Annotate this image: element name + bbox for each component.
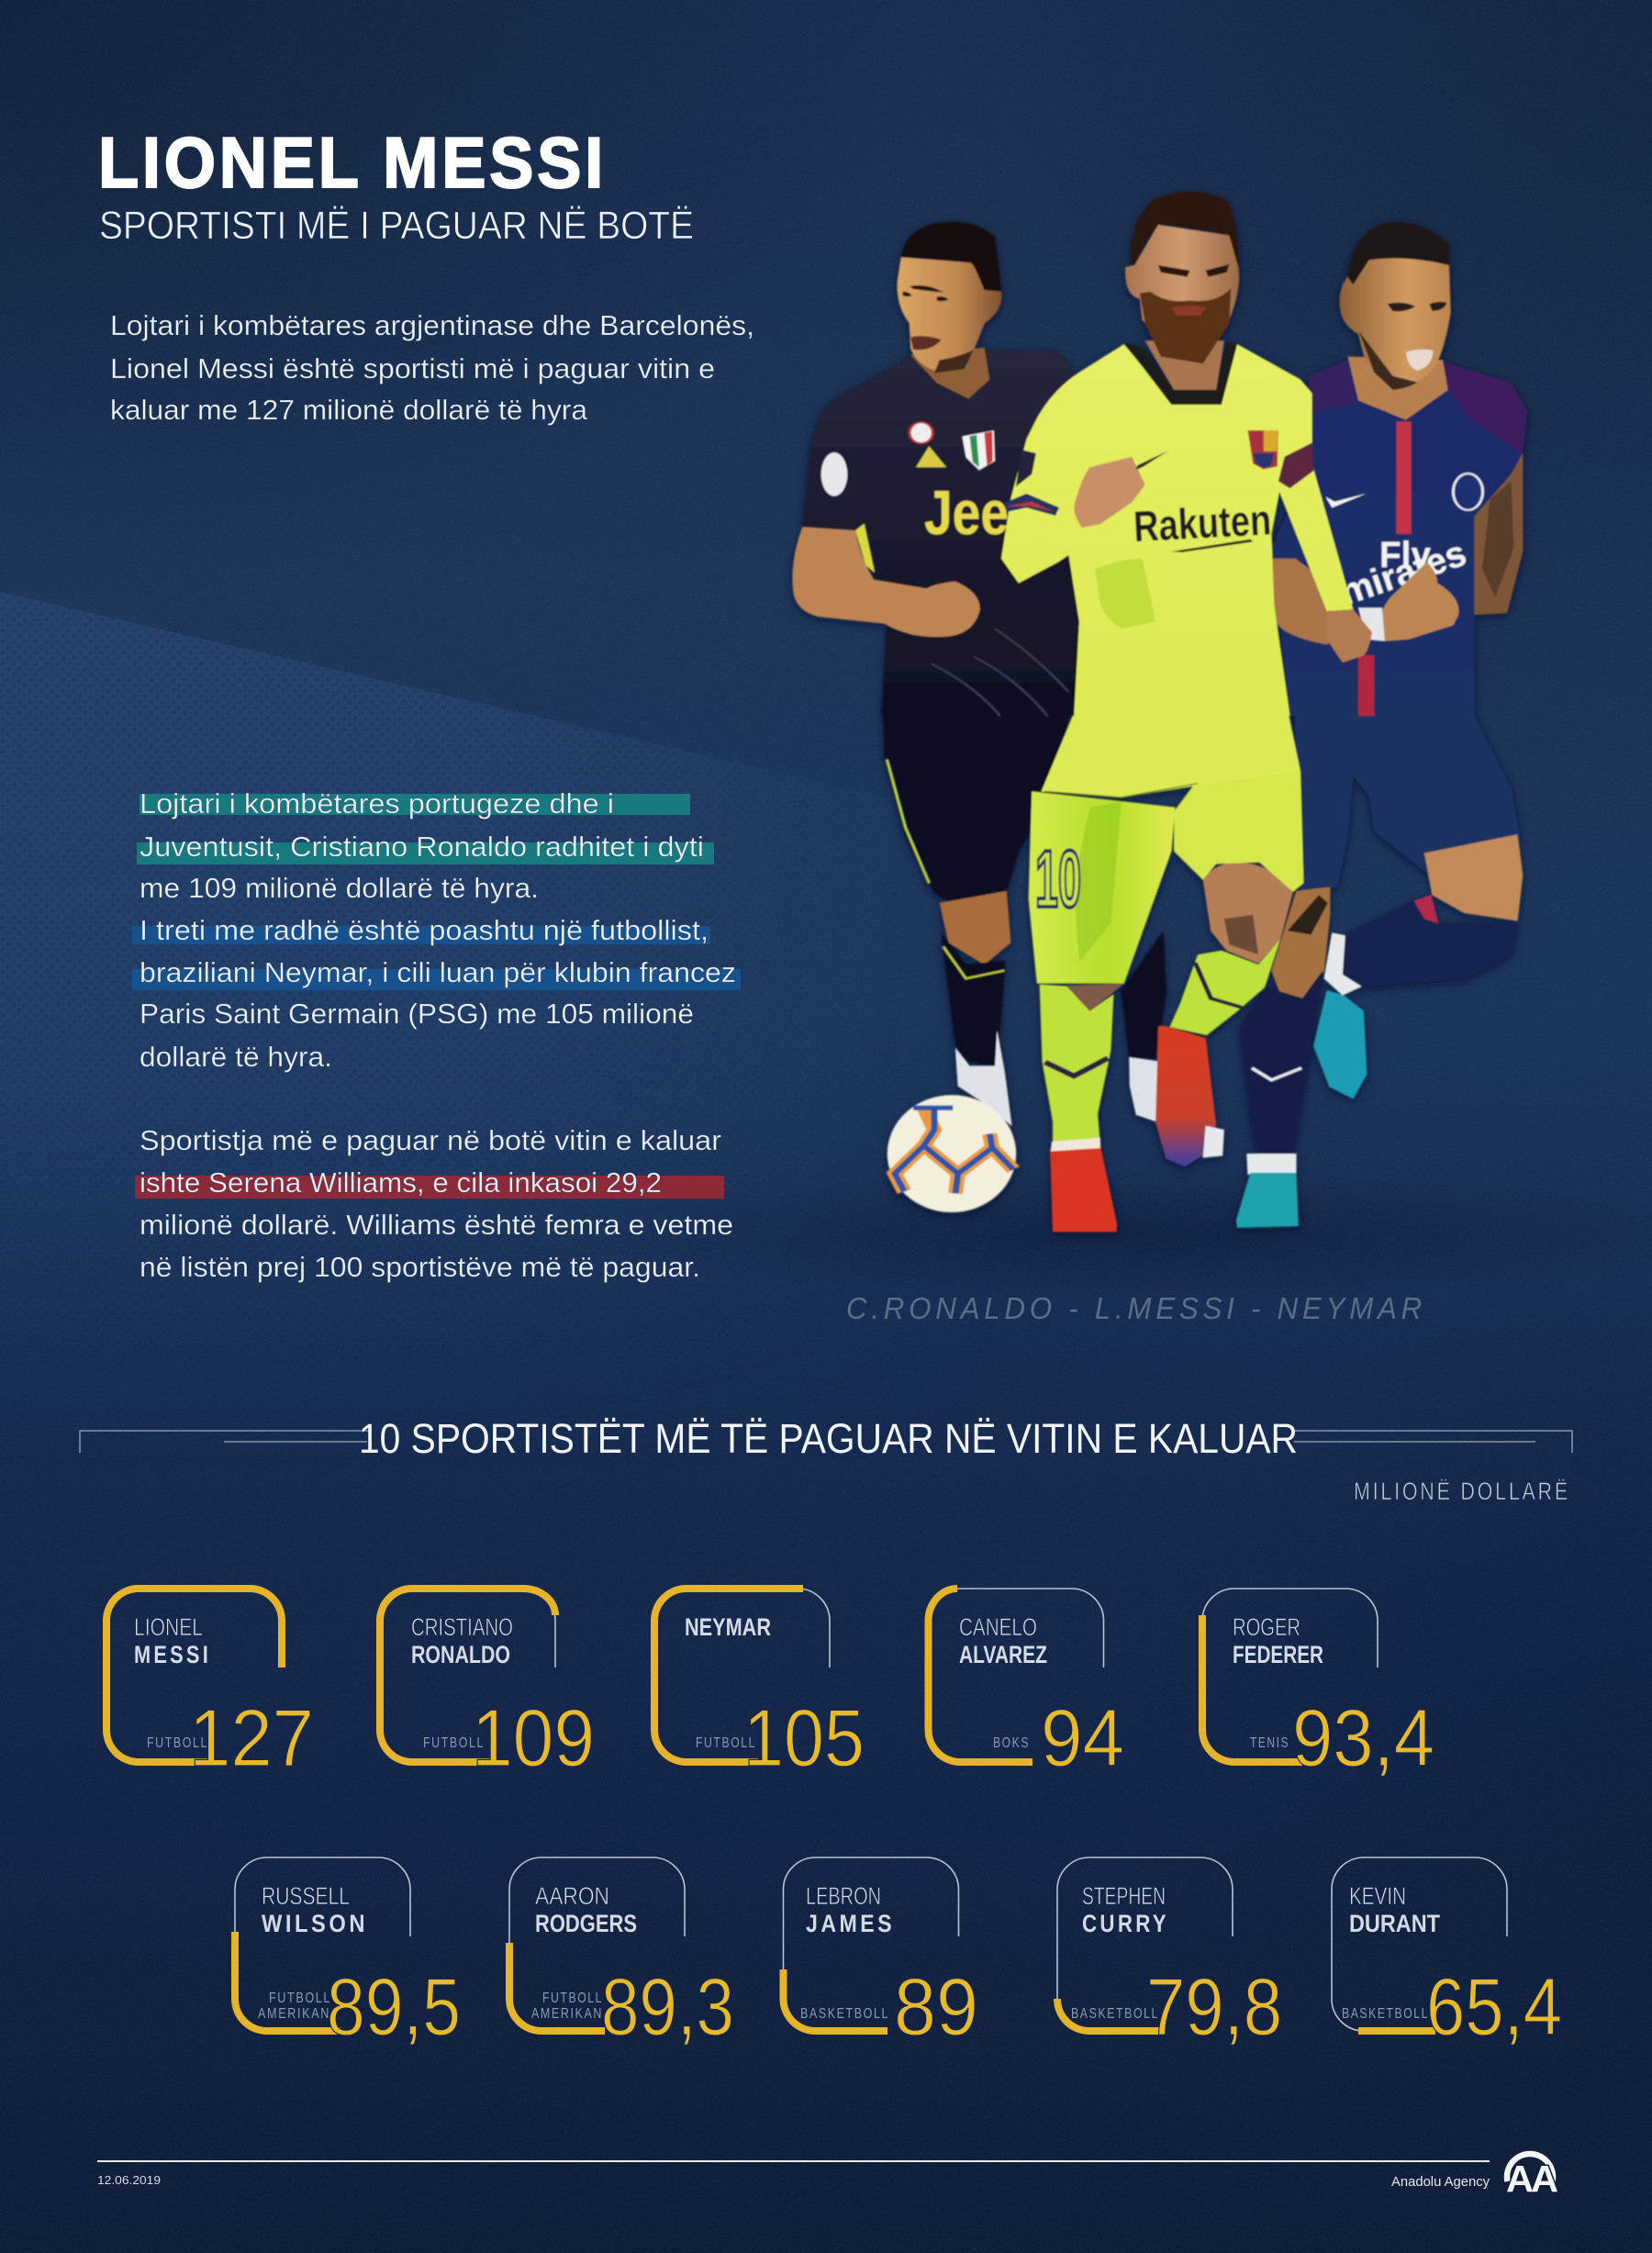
Ronaldo arm [793, 527, 980, 637]
Neymar shirt sponsor: mirates [1335, 533, 1471, 614]
card: Curry [1057, 1857, 1282, 2052]
card: Rodgers: AMERIKAN [531, 2006, 603, 2022]
card: Messi: MESSI [134, 1641, 211, 1668]
card: Alvarez: CANELO [959, 1613, 1037, 1641]
paragraph: Ronaldo and Neymar: I treti me radhë është poashtu një futbollist, [140, 914, 709, 946]
intro text block: kaluar me 127 milionë dollarë të hyra [110, 394, 588, 426]
card: James: LEBRON [806, 1882, 881, 1910]
Ronaldo shirt sponsor: Jee [924, 478, 1009, 548]
card: Wilson: 89,5 [327, 1961, 461, 2052]
card: Wilson: AMERIKAN [258, 2006, 330, 2022]
card: Durant: BASKETBOLL [1342, 2006, 1429, 2022]
card: Wilson [235, 1857, 461, 2052]
subtitle: SPORTISTI MË I PAGUAR NË BOTË [99, 204, 694, 248]
source: Anadolu Agency [1391, 2175, 1490, 2190]
card: Rodgers: AARON [535, 1882, 609, 1910]
player illustration: Ronaldo, Messi, Neymar [793, 192, 1527, 1232]
card: Messi: LIONEL [134, 1613, 203, 1641]
card: Ronaldo: RONALDO [411, 1641, 510, 1668]
highlight: teal Ronaldo [137, 794, 714, 864]
card: Neymar: FUTBOLL [696, 1735, 756, 1751]
paragraph: Serena Williams: milionë dollarë. Williams është femra e vetme [140, 1209, 733, 1241]
football [887, 1095, 1016, 1212]
card: Durant: KEVIN [1349, 1882, 1406, 1910]
card: Durant [1332, 1857, 1562, 2052]
paragraph: Serena Williams [140, 1124, 733, 1283]
card: Wilson: RUSSELL [262, 1882, 350, 1910]
Messi upper body [1001, 192, 1372, 716]
card: James: JAMES [806, 1910, 895, 1937]
heading rules left [80, 1431, 371, 1453]
card: Rodgers: 89,3 [601, 1961, 734, 2052]
card: Ronaldo: CRISTIANO [411, 1613, 513, 1641]
footer rule [97, 2160, 1490, 2162]
intro text block: Lionel Messi është sportisti më i paguar vitin e [110, 352, 715, 385]
card: Durant: 65,4 [1426, 1961, 1562, 2052]
Messi lower body [1029, 716, 1303, 1232]
card: Curry: 79,8 [1146, 1961, 1282, 2052]
card: Messi: FUTBOLL [147, 1735, 208, 1751]
Neymar hand [1358, 562, 1458, 641]
card: Alvarez: 94 [1041, 1692, 1124, 1783]
card: Rodgers [509, 1857, 734, 2052]
card: Federer: TENIS [1250, 1735, 1289, 1751]
Messi shirt sponsor: Rakuten [1133, 495, 1272, 551]
card: James: 89 [894, 1961, 978, 2052]
card: Rodgers: RODGERS [535, 1910, 637, 1937]
card: Curry: BASKETBOLL [1071, 2006, 1159, 2022]
card: Messi: 127 [189, 1692, 314, 1783]
Neymar forearm [1270, 559, 1358, 644]
paragraph: Ronaldo and Neymar [140, 787, 736, 1073]
card: Wilson: FUTBOLL [269, 1991, 331, 2006]
card: Alvarez: ALVAREZ [959, 1641, 1047, 1668]
card: Curry: CURRY [1082, 1910, 1169, 1937]
Ronaldo upper body [793, 222, 1100, 716]
card: Federer [1202, 1589, 1434, 1783]
card: Neymar [654, 1589, 865, 1783]
highlight: blue Neymar [132, 926, 741, 990]
paragraph: Serena Williams: në listën prej 100 sportistëve më të paguar. [140, 1251, 700, 1283]
heading rules right [1294, 1431, 1572, 1453]
highlighted text block [132, 787, 741, 1283]
intro text block [110, 309, 754, 426]
unit label: MILIONË DOLLARË [1354, 1478, 1570, 1505]
card: Rodgers: FUTBOLL [542, 1991, 603, 2006]
paragraph: Ronaldo and Neymar: dollarë të hyra. [140, 1041, 332, 1073]
card: Ronaldo [380, 1589, 595, 1783]
card: James: BASKETBOLL [800, 2006, 889, 2022]
players caption: C.RONALDO - L.MESSI - NEYMAR [846, 1291, 1426, 1325]
paragraph: Serena Williams: Sportistja më e paguar në botë vitin e kaluar [140, 1124, 721, 1156]
section heading [80, 1415, 1572, 1462]
paragraph: Ronaldo and Neymar: Lojtari i kombëtares portugeze dhe i [140, 787, 614, 820]
Neymar lower body [1236, 716, 1523, 1228]
card: Federer: 93,4 [1292, 1692, 1434, 1783]
paragraph: Ronaldo and Neymar: Juventusit, Cristiano Ronaldo radhitet i dyti [140, 831, 704, 863]
paragraph: Ronaldo and Neymar: me 109 milionë dollarë të hyra. [140, 872, 539, 904]
Messi shorts number: 10 [1035, 833, 1081, 924]
card: Alvarez: BOKS [993, 1735, 1030, 1751]
card: James [784, 1857, 978, 2052]
paragraph: Ronaldo and Neymar: braziliani Neymar, i cili luan për klubin francez [140, 956, 736, 988]
card: Ronaldo: FUTBOLL [423, 1735, 485, 1751]
icon: Anadolu Agency logo: AA [1506, 2158, 1557, 2200]
card: Ronaldo: 109 [472, 1692, 595, 1783]
highlight: red Serena [135, 1176, 724, 1199]
card: Federer: FEDERER [1233, 1641, 1323, 1668]
card: Messi [106, 1589, 314, 1783]
card: Federer: ROGER [1233, 1613, 1300, 1641]
intro text block: Lojtari i kombëtares argjentinase dhe Barcelonës, [110, 309, 754, 341]
card: Wilson: WILSON [262, 1910, 368, 1937]
card: Durant: DURANT [1349, 1910, 1440, 1937]
Ronaldo crest and sponsor [821, 422, 995, 496]
card: Neymar: NEYMAR [685, 1613, 771, 1641]
card: Neymar: 105 [743, 1692, 865, 1783]
card: Curry: STEPHEN [1082, 1882, 1166, 1910]
Neymar upper body [1270, 222, 1527, 716]
Ronaldo lower body [883, 716, 1166, 1126]
paragraph: Serena Williams: ishte Serena Williams, e cila inkasoi 29,2 [140, 1166, 662, 1199]
title: LIONEL MESSI [98, 122, 607, 203]
date: 12.06.2019 [97, 2173, 161, 2187]
Neymar shirt sponsor: Fly [1379, 535, 1432, 575]
paragraph: Ronaldo and Neymar: Paris Saint Germain (PSG) me 105 milionë [140, 998, 694, 1030]
card: Alvarez [929, 1589, 1124, 1783]
heading text: 10 SPORTISTËT MË TË PAGUAR NË VITIN E KALUAR [359, 1415, 1298, 1462]
